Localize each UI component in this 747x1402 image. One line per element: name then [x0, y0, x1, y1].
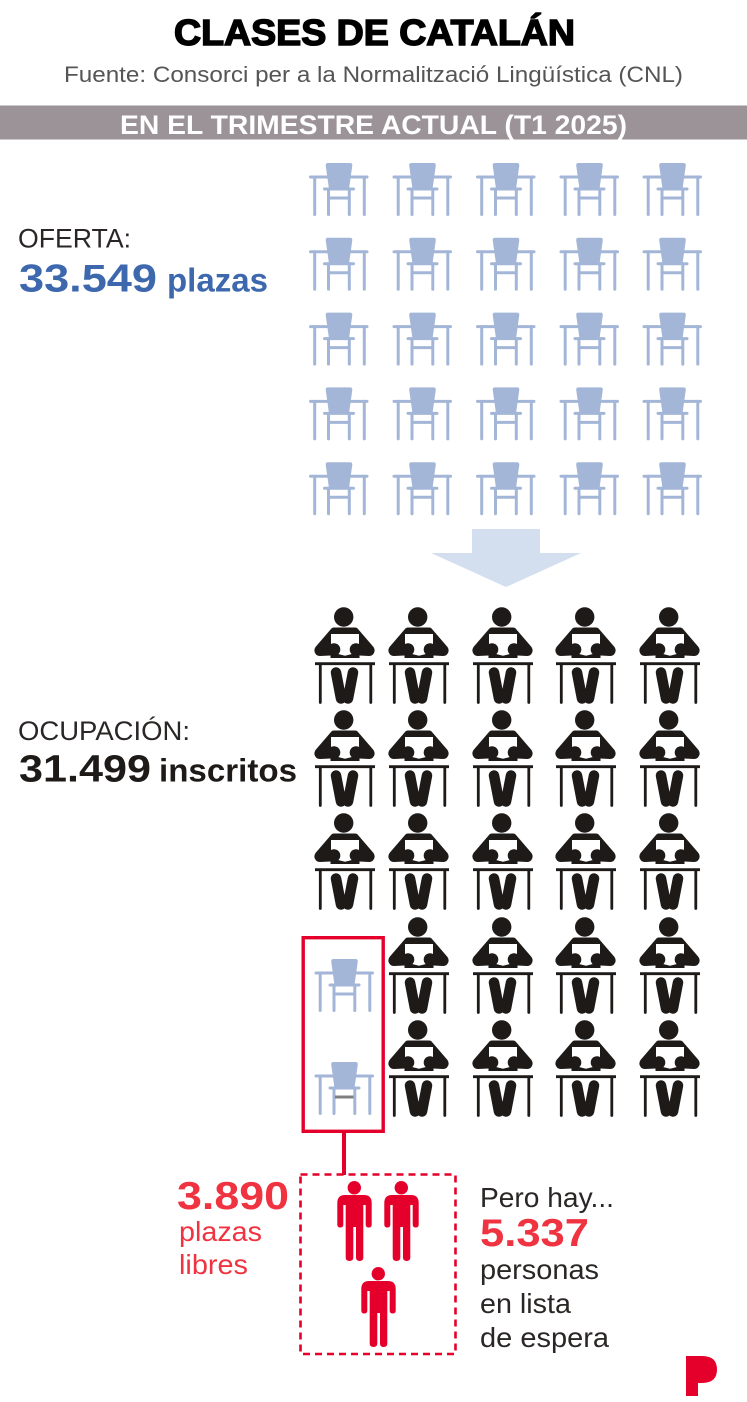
text block: plazas libres [177, 1175, 289, 1280]
text block: oferta: OFERTA: [18, 224, 131, 254]
icon: free chair 2 [316, 1062, 372, 1114]
highlight box: free places [303, 938, 383, 1131]
logo: P [686, 1356, 717, 1396]
text block: ocupación: inscritos [159, 752, 297, 788]
waiting list box [300, 1174, 456, 1354]
text block: plazas libres: libres [179, 1249, 248, 1280]
text block: lista de espera: Pero hay... [480, 1182, 614, 1213]
icon: person 1 [337, 1181, 372, 1261]
icon: person 3 [361, 1267, 396, 1347]
text block: lista de espera: 5.337 [480, 1212, 589, 1255]
source line: Fuente: Consorci per a la Normalització Lingüística (CNL) [64, 62, 683, 87]
text block: lista de espera [480, 1182, 614, 1353]
text block: oferta [18, 224, 268, 300]
icon: person 2 [384, 1181, 419, 1261]
text block: lista de espera: de espera [480, 1322, 609, 1353]
title: CLASES DE CATALÁN [174, 12, 575, 53]
icon grid: students at desks, ocupación [314, 607, 700, 1116]
text block: ocupación [18, 715, 297, 790]
icon: free chair 1 [316, 959, 372, 1010]
text block: oferta: 33.549 [19, 258, 157, 300]
text block: ocupación: OCUPACIÓN: [18, 715, 190, 746]
section band: trimestre actual [0, 106, 747, 140]
text block: plazas libres: 3.890 [177, 1175, 289, 1218]
text block: lista de espera: en lista [480, 1288, 571, 1319]
icon grid: chairs and desks, oferta [310, 163, 700, 514]
arrow: down [431, 529, 581, 587]
text block: lista de espera: personas [480, 1254, 599, 1285]
text block: oferta: plazas [167, 262, 268, 298]
text block: ocupación: 31.499 [19, 748, 151, 790]
text block: plazas libres: plazas [179, 1216, 262, 1247]
section band: trimestre actual: EN EL TRIMESTRE ACTUAL (T1 2025) [120, 110, 627, 140]
connector [342, 1133, 346, 1175]
